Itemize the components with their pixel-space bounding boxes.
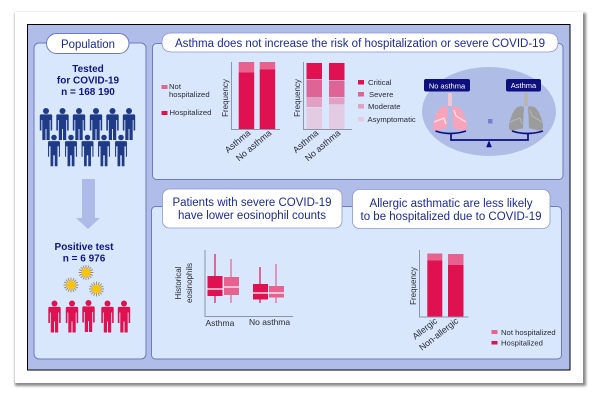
bar chart: hospitalization: Frequency xyxy=(221,79,230,117)
equals sign xyxy=(488,119,492,124)
heading: eosinophils: have lower eosinophil counts xyxy=(178,210,326,222)
icons: positive people xyxy=(48,300,130,332)
heading: eosinophils: Patients with severe COVID-19 xyxy=(172,197,332,209)
bar chart: allergic: Frequency xyxy=(409,267,418,305)
label: asthma: Asthma xyxy=(511,81,537,90)
icons: tested people xyxy=(40,108,135,166)
text: positive test: n = 6 976 xyxy=(63,254,106,265)
bar chart: allergic: Non-allergic xyxy=(417,315,461,352)
bar chart: hospitalization: Asthma xyxy=(223,128,252,155)
box plot: eosinophils xyxy=(174,250,293,328)
illustration: lungs on balance xyxy=(422,67,556,156)
heading: allergic: to be hospitalized due to COVID-19 xyxy=(360,211,542,223)
legend: allergic: Not hospitalized xyxy=(501,328,556,337)
legend: hospitalization: Hospitalized xyxy=(170,108,211,117)
arrow: down xyxy=(76,179,100,229)
icon: healthy lungs xyxy=(433,93,467,131)
bar chart: severity xyxy=(291,62,352,163)
legend: hospitalization xyxy=(162,82,211,117)
text: tested: n = 168 190 xyxy=(61,87,115,98)
legend: hospitalization: hospitalized xyxy=(169,90,210,99)
bar chart: hospitalization: No asthma xyxy=(234,128,273,163)
icon: asthma lungs xyxy=(509,93,543,131)
text: positive test: Positive test xyxy=(55,242,114,253)
bar chart: severity: Frequency xyxy=(293,79,302,117)
text: tested: Tested xyxy=(72,64,104,75)
legend: severity xyxy=(358,78,416,124)
panel: asthma risk xyxy=(152,33,563,180)
icon: balance xyxy=(436,131,543,147)
bar chart: allergic xyxy=(409,250,468,352)
heading: asthma risk: Asthma does not increase the risk of hospitalization or severe COVID-19 xyxy=(175,38,545,50)
bar chart: hospitalization xyxy=(221,62,280,163)
heading: population: Population xyxy=(61,39,115,51)
box plot: eosinophils: Historical xyxy=(174,266,183,299)
legend: allergic: Hospitalized xyxy=(501,338,543,348)
legend: severity: Critical xyxy=(368,78,392,87)
text: tested: for COVID-19 xyxy=(57,76,120,86)
label: no asthma: No asthma xyxy=(429,82,466,90)
legend: allergic xyxy=(492,328,556,348)
box plot: eosinophils: eosinophils xyxy=(185,263,194,303)
panel: population xyxy=(34,34,146,359)
legend: severity: Moderate xyxy=(368,102,400,111)
heading: allergic xyxy=(352,190,550,228)
heading: allergic: Allergic asthmatic are less likely xyxy=(370,198,533,210)
bar chart: severity: Asthma xyxy=(291,128,320,155)
icons: virus xyxy=(64,265,104,296)
bar chart: allergic: Allergic xyxy=(410,315,440,341)
bar chart: severity: No asthma xyxy=(303,128,342,163)
background panel xyxy=(28,24,570,370)
legend: severity: Asymptomatic xyxy=(368,115,416,124)
heading: eosinophils xyxy=(162,189,342,228)
legend: hospitalization: Not xyxy=(169,82,182,91)
box plot: eosinophils: No asthma xyxy=(249,317,290,327)
heading: population xyxy=(46,34,129,54)
panel: subgroup analyses xyxy=(152,189,562,359)
box plot: eosinophils: Asthma xyxy=(206,318,235,328)
heading: asthma risk xyxy=(162,33,558,52)
legend: severity: Severe xyxy=(369,90,393,99)
